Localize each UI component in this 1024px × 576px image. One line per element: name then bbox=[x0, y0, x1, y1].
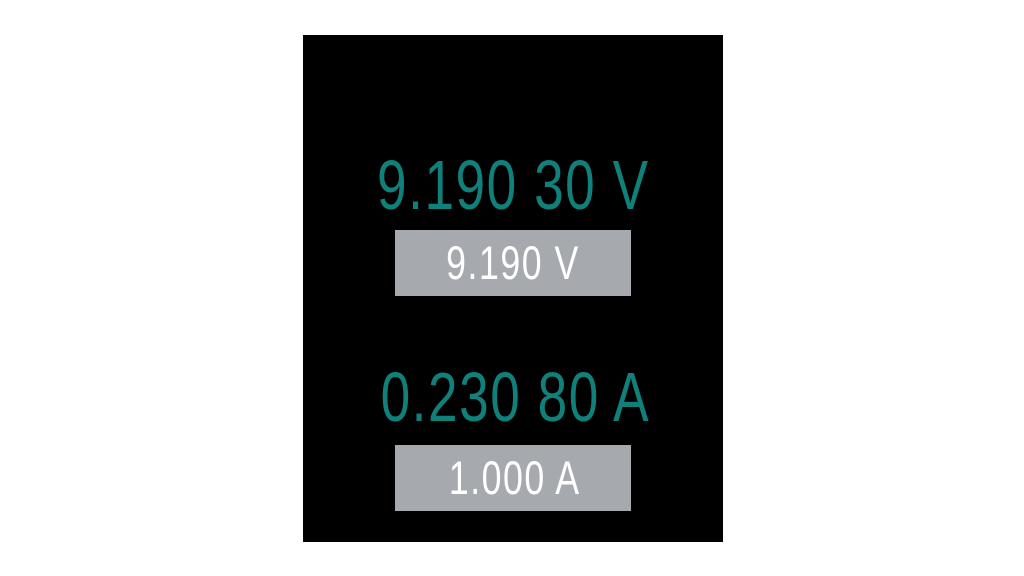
voltage reading: 9.190 30 V bbox=[377, 146, 649, 224]
voltage setpoint box bbox=[395, 230, 631, 296]
current setpoint box: 1.000 A bbox=[449, 451, 581, 504]
current reading: 0.230 80 A bbox=[380, 358, 650, 436]
panel: instrument display bbox=[303, 35, 723, 542]
current setpoint box bbox=[395, 445, 631, 511]
voltage setpoint box: 9.190 V bbox=[446, 236, 580, 289]
